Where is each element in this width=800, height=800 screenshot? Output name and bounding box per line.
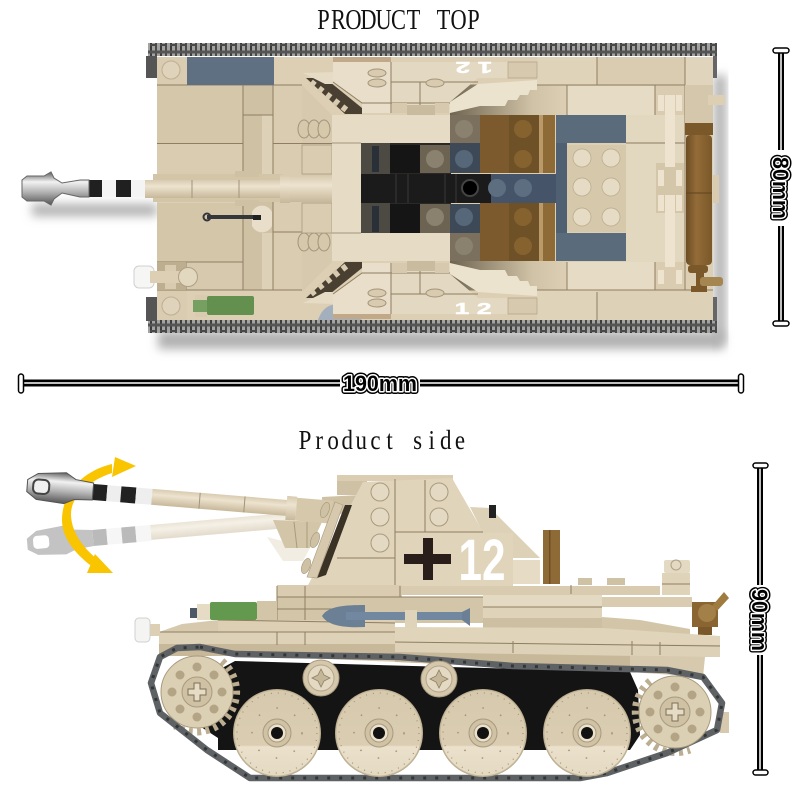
gun barrel top (22, 171, 332, 206)
hull lower bands (159, 620, 720, 677)
dimension: 80mm: 80mm (768, 157, 793, 219)
side arm blocks beside gun (302, 145, 332, 233)
tactical number 12 top: 1 2 (454, 301, 492, 318)
brown blocks (480, 115, 555, 261)
elevation arrow (62, 457, 136, 573)
black lower hull (198, 661, 640, 750)
interior compartment (361, 115, 567, 261)
lower hatch assembly (303, 261, 537, 319)
brown exhaust cylinder (685, 85, 725, 292)
dimension: 190mm: 190mm (343, 371, 417, 396)
side view of tank (26, 457, 729, 778)
dimension: 190mm (18, 371, 744, 396)
rear brackets (656, 95, 684, 284)
headlight (134, 262, 198, 290)
road wheels (233, 689, 631, 777)
front hull upper band (307, 475, 513, 587)
wedge gun mount (273, 495, 360, 548)
tactical number 12 top: 1 2 (455, 58, 492, 75)
title: product side: Product side (299, 426, 465, 455)
upper hatch assembly (303, 57, 537, 115)
balkenkreuz insignia (404, 538, 451, 580)
rear sloped plate (470, 505, 540, 584)
blue panel and stud on front deck (162, 57, 362, 320)
rear brown horn (692, 592, 729, 635)
periscope rod (204, 206, 272, 232)
hull upper side (277, 560, 692, 636)
U shaped superstructure (332, 115, 450, 261)
title: product top: PRODUCT TOP (317, 5, 480, 36)
sprocket wheels (161, 656, 711, 748)
tracks (146, 43, 717, 333)
shovel (322, 605, 470, 628)
dimension: 190mm: 190mm (343, 371, 417, 396)
dimension: 80mm (768, 48, 793, 326)
raised gun (26, 470, 334, 526)
superstructure panel lines and studs (337, 479, 483, 586)
caterpillar track (151, 647, 722, 778)
dimension: 80mm: 80mm (768, 157, 793, 219)
sprocket teeth (175, 661, 729, 753)
lowered gun position (ghost) (26, 506, 310, 561)
return rollers (303, 660, 457, 697)
dimension: 90mm (747, 463, 772, 775)
angled side hatch (300, 501, 352, 578)
tactical number 12 top (454, 58, 492, 318)
dimension: 190mm: 190mm (343, 371, 417, 396)
dimension: 80mm: 80mm (768, 157, 793, 219)
brown bar (543, 530, 560, 584)
dimension: 90mm: 90mm (747, 589, 772, 651)
green tool on deck (193, 295, 254, 317)
white number 12: 12 (458, 528, 506, 593)
side panel studs (298, 120, 330, 251)
top view of tank (22, 43, 726, 349)
top view shadow (32, 75, 726, 349)
dimension: 90mm: 90mm (747, 589, 772, 651)
front lens and stowed green tool (135, 601, 277, 642)
dimension: 90mm: 90mm (747, 589, 772, 651)
blue frame with stud plate (556, 115, 626, 261)
hull deck (157, 57, 713, 320)
